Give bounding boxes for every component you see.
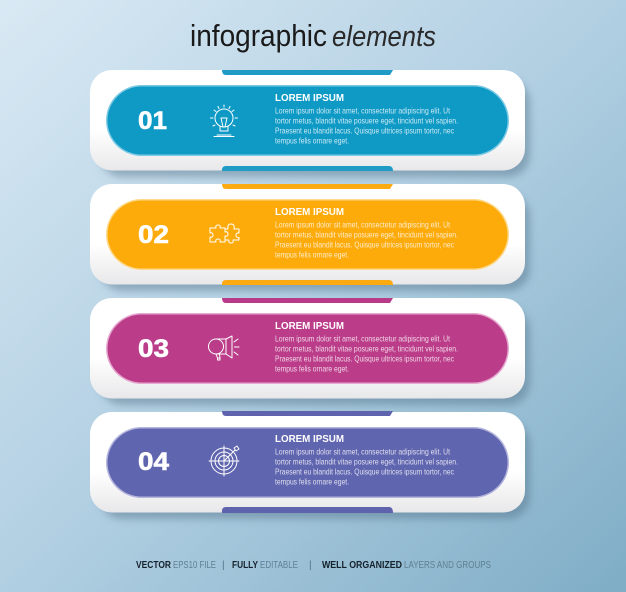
text block 03: LOREM IPSUM (275, 320, 344, 332)
panel: step 01 (90, 70, 530, 177)
text block 03: tortor metus, blandit vitae posuere eget, tincidunt vel sapien. (275, 344, 458, 354)
footer: EDITABLE (260, 560, 298, 571)
text block 02 (275, 206, 458, 260)
icon: light bulb (210, 105, 238, 136)
panel: step 04 (90, 411, 530, 519)
text block 01: tortor metus, blandit vitae posuere eget, tincidunt vel sapien. (275, 116, 458, 126)
text block 04 (275, 433, 458, 486)
text block 03: tempus felis ornare eget. (275, 364, 349, 374)
icon: puzzle pieces (210, 224, 239, 243)
text block 02: Praesent eu blandit lacus. Quisque ultrices ipsum tortor, nec (275, 240, 454, 250)
number 02: 02 (138, 221, 169, 249)
footer: | (309, 560, 312, 571)
icon: target (209, 446, 239, 476)
icon: megaphone (209, 336, 239, 360)
text block 01: tempus felis ornare eget. (275, 136, 349, 146)
footer: LAYERS AND GROUPS (404, 560, 491, 571)
text block 01 (275, 92, 458, 146)
footer (136, 560, 491, 571)
title: infographic (190, 18, 327, 53)
text block 02: Lorem ipsum dolor sit amet, consectetur adipiscing elit. Ut (275, 220, 451, 230)
number 01: 01 (138, 107, 167, 135)
title (190, 18, 436, 53)
text block 01: Praesent eu blandit lacus. Quisque ultrices ipsum tortor, nec (275, 126, 454, 136)
text block 04: Praesent eu blandit lacus. Quisque ultrices ipsum tortor, nec (275, 466, 454, 476)
title: elements (332, 21, 436, 53)
text block 03: Praesent eu blandit lacus. Quisque ultrices ipsum tortor, nec (275, 354, 454, 364)
footer: FULLY (232, 560, 258, 571)
number 04: 04 (138, 448, 169, 476)
text block 02: LOREM IPSUM (275, 206, 344, 218)
footer: VECTOR (136, 560, 172, 571)
panel: step 03 (90, 298, 530, 405)
text block 01: LOREM IPSUM (275, 92, 344, 104)
footer: | (222, 560, 225, 571)
text block 04: tempus felis ornare eget. (275, 476, 349, 486)
panel: step 02 (90, 184, 530, 291)
footer: EPS10 FILE (173, 560, 216, 571)
text block 03 (275, 320, 458, 374)
text block 02: tempus felis ornare eget. (275, 250, 349, 260)
text block 02: tortor metus, blandit vitae posuere eget, tincidunt vel sapien. (275, 230, 458, 240)
text block 01: Lorem ipsum dolor sit amet, consectetur adipiscing elit. Ut (275, 106, 451, 116)
text block 04: tortor metus, blandit vitae posuere eget, tincidunt vel sapien. (275, 456, 458, 466)
text block 03: Lorem ipsum dolor sit amet, consectetur adipiscing elit. Ut (275, 334, 451, 344)
footer: WELL ORGANIZED (322, 560, 402, 571)
number 03: 03 (138, 335, 169, 363)
text block 04: LOREM IPSUM (275, 433, 344, 445)
text block 04: Lorem ipsum dolor sit amet, consectetur adipiscing elit. Ut (275, 446, 451, 456)
